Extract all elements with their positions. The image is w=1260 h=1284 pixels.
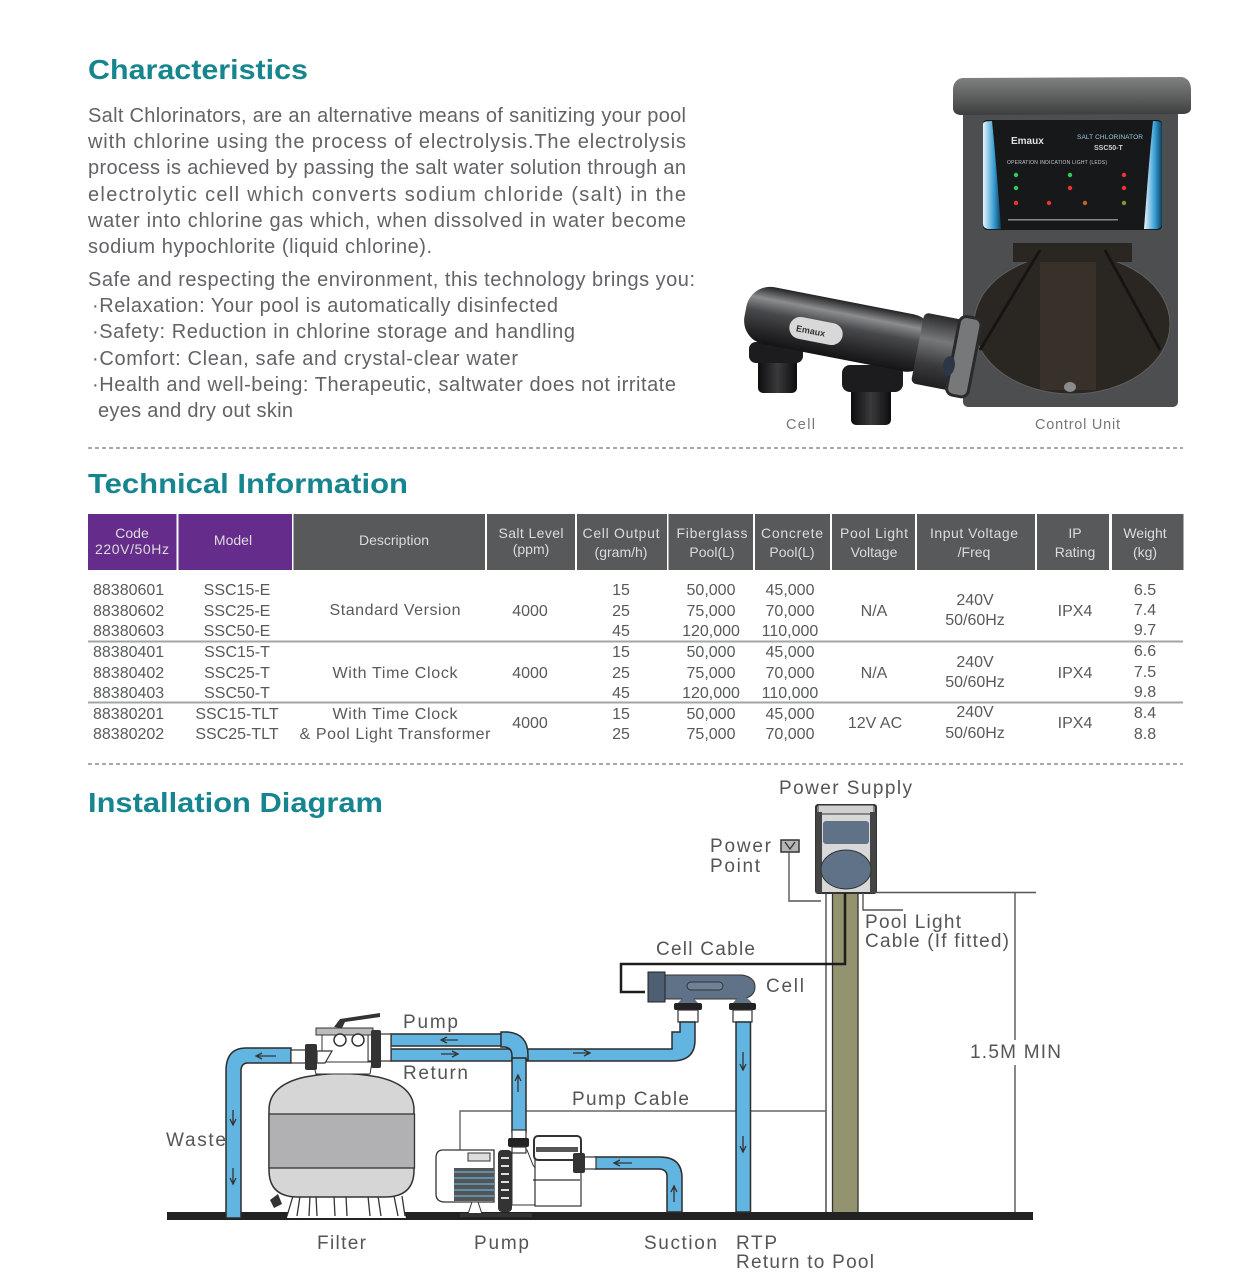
table rows: time clock and pool light transformer: 70,000: [766, 726, 815, 743]
label: Power Point: Point: [710, 856, 761, 877]
table rows: with time clock: SSC25-T: [204, 665, 270, 682]
label: Pool Light Cable: [865, 912, 1009, 952]
label: Pool Light Cable: Cable (If fitted): [865, 931, 1009, 952]
table rows: time clock and pool light transformer: [93, 704, 1156, 743]
label: Filter: Filter: [317, 1233, 367, 1254]
table rows: time clock and pool light transformer: SSC15-TLT: [195, 706, 279, 723]
photo: control unit: OPERATION INDICATION LIGHT (LEDS): [1007, 160, 1107, 166]
diagram: level and height lines: [863, 892, 1036, 1212]
label: Control Unit: Control Unit: [1035, 417, 1120, 433]
table rows: standard version: Standard Version: [330, 602, 460, 619]
text block: introduction: [87, 105, 686, 258]
table rows: with time clock: 110,000: [762, 685, 818, 702]
text block: introduction: electrolytic cell which converts sodium chloride (salt) in the: [88, 184, 686, 206]
label: Cell Cable: Cell Cable: [656, 939, 755, 960]
diagram: pump: [436, 1136, 585, 1217]
text block: introduction: sodium hypochlorite (liquid chlorine).: [88, 236, 432, 258]
table rows: with time clock: 7.5: [1134, 664, 1156, 681]
photo: cell: [737, 275, 982, 425]
table header: Model: [214, 532, 252, 548]
table rows: standard version: 50,000: [687, 582, 736, 599]
table rows: time clock and pool light transformer: 50/60Hz: [945, 725, 1005, 742]
text block: benefits list: ·Health and well-being: Therapeutic, saltwater does not irritate: [92, 374, 676, 396]
table header: Fiberglass: [676, 525, 748, 541]
table rows: time clock and pool light transformer: 8.4: [1134, 705, 1156, 722]
diagram: post with cables: [460, 893, 858, 1212]
table rows: with time clock: [93, 643, 1156, 702]
label: RTP Return to Pool: Return to Pool: [736, 1252, 874, 1273]
table header: Description: [359, 532, 429, 548]
table rows: standard version: SSC15-E: [204, 582, 270, 599]
table rows: with time clock: 50/60Hz: [945, 674, 1005, 691]
table rows: time clock and pool light transformer: 88380202: [93, 726, 164, 743]
table rows: standard version: 7.4: [1134, 602, 1156, 619]
label: Power Point: Power: [710, 836, 772, 857]
text block: benefits list: eyes and dry out skin: [98, 400, 293, 422]
label: Pump: Pump: [474, 1233, 529, 1254]
table rows: with time clock: 45,000: [766, 644, 815, 661]
table header: Cell Output: [582, 525, 660, 541]
table rows: standard version: 45,000: [766, 582, 815, 599]
diagram: pipes: [226, 1022, 750, 1218]
table rows: with time clock: 120,000: [682, 685, 740, 702]
table rows: standard version: 70,000: [766, 603, 815, 620]
table header: (gram/h): [595, 544, 647, 560]
table rows: time clock and pool light transformer: 8.8: [1134, 726, 1156, 743]
text block: benefits list: Safe and respecting the environment, this technology brings you:: [88, 269, 695, 291]
text block: benefits list: ·Safety: Reduction in chlorine storage and handling: [92, 321, 575, 343]
table header: Input Voltage: [930, 525, 1018, 541]
label: Power Supply: Power Supply: [779, 778, 912, 799]
table rows: standard version: N/A: [861, 603, 888, 620]
table rows: time clock and pool light transformer: IPX4: [1058, 715, 1092, 732]
text block: introduction: Salt Chlorinators, are an alternative means of sanitizing your pool: [88, 105, 686, 127]
label: Cell: Cell: [786, 417, 815, 433]
label: 1.5M MIN: 1.5M MIN: [970, 1042, 1061, 1063]
table rows: time clock and pool light transformer: SSC25-TLT: [195, 726, 279, 743]
table rows: with time clock: 15: [612, 644, 630, 661]
text block: introduction: process is achieved by passing the salt water solution through an: [88, 157, 686, 179]
heading: Characteristics: Characteristics: [88, 54, 308, 85]
table header: (kg): [1133, 544, 1157, 560]
diagram: cell cable: [621, 893, 845, 992]
text block: benefits list: ·Comfort: Clean, safe and crystal-clear water: [92, 348, 518, 370]
table rows: time clock and pool light transformer: 25: [612, 726, 630, 743]
table rows: time clock and pool light transformer: 45,000: [766, 706, 815, 723]
label: Pump Cable: Pump Cable: [572, 1089, 689, 1110]
table rows: time clock and pool light transformer: 15: [612, 706, 630, 723]
table rows: standard version: SSC25-E: [204, 603, 270, 620]
text block: benefits list: [88, 269, 695, 422]
diagram: power point: [781, 840, 821, 901]
table rows: standard version: 6.5: [1134, 582, 1156, 599]
table rows: with time clock: 88380403: [93, 685, 164, 702]
table rows: with time clock: 75,000: [687, 665, 736, 682]
table header: [88, 514, 1184, 570]
table header: Concrete: [761, 525, 823, 541]
label: Power Point: [710, 836, 772, 877]
table rows: with time clock: 88380402: [93, 665, 164, 682]
table rows: with time clock: 9.8: [1134, 684, 1156, 701]
table header: Salt Level: [498, 525, 564, 541]
table rows: with time clock: N/A: [861, 665, 888, 682]
label: RTP Return to Pool: RTP: [736, 1233, 777, 1254]
table header: Voltage: [851, 544, 898, 560]
table header: (ppm): [513, 541, 549, 557]
table rows: time clock and pool light transformer: 4000: [512, 715, 548, 732]
heading: Technical Information: Technical Information: [88, 468, 408, 499]
table rows: standard version: 50/60Hz: [945, 612, 1005, 629]
table rows: with time clock: SSC50-T: [204, 685, 270, 702]
table rows: standard version: 240V: [956, 592, 994, 609]
table rows: time clock and pool light transformer: & Pool Light Transformer: [300, 726, 491, 743]
photo: control unit: Emaux: [1011, 136, 1044, 147]
table header: Rating: [1055, 544, 1095, 560]
table rows: standard version: 75,000: [687, 603, 736, 620]
table rows: standard version: 88380602: [93, 603, 164, 620]
label: Pump: Pump: [403, 1012, 458, 1033]
table rows: standard version: [93, 582, 1156, 640]
table rows: with time clock: 25: [612, 665, 630, 682]
photo: control unit: [953, 77, 1191, 407]
table rows: time clock and pool light transformer: 75,000: [687, 726, 736, 743]
table rows: standard version: 88380601: [93, 582, 164, 599]
label: Cell: Cell: [766, 976, 804, 997]
table header: Weight: [1123, 525, 1167, 541]
label: RTP Return to Pool: [736, 1233, 874, 1273]
table header: /Freq: [958, 544, 990, 560]
table rows: standard version: 15: [612, 582, 630, 599]
text block: benefits list: ·Relaxation: Your pool is automatically disinfected: [92, 295, 558, 317]
photo: cell: Emaux: [795, 323, 826, 339]
table rows: standard version: 4000: [512, 603, 548, 620]
table rows: standard version: 45: [612, 623, 630, 640]
table rows: with time clock: 240V: [956, 654, 994, 671]
diagram: flow arrows: [230, 1037, 746, 1202]
table rows: standard version: 25: [612, 603, 630, 620]
table header: Code: [115, 525, 149, 541]
photo: control unit: SSC50-T: [1094, 145, 1124, 152]
table rows: time clock and pool light transformer: 88380201: [93, 706, 164, 723]
table header: Pool Light: [840, 525, 908, 541]
table rows: with time clock: 4000: [512, 665, 548, 682]
table rows: with time clock: With Time Clock: [332, 665, 458, 682]
table header: 220V/50Hz: [95, 541, 169, 557]
label: Suction: Suction: [644, 1233, 717, 1254]
table header: Pool(L): [689, 544, 735, 560]
text block: introduction: water into chlorine gas which, when dissolved in water become: [87, 210, 686, 232]
table rows: standard version: SSC50-E: [204, 623, 270, 640]
diagram: control unit: [816, 805, 876, 893]
table rows: time clock and pool light transformer: 50,000: [687, 706, 736, 723]
table rows: standard version: 9.7: [1134, 622, 1156, 639]
table rows: with time clock: SSC15-T: [204, 644, 270, 661]
table rows: standard version: 110,000: [762, 623, 818, 640]
photo: control unit: SALT CHLORINATOR: [1077, 134, 1143, 141]
table rows: time clock and pool light transformer: With Time Clock: [332, 706, 458, 723]
table rows: standard version: IPX4: [1058, 603, 1092, 620]
table header: Pool(L): [769, 544, 815, 560]
table rows: standard version: 88380603: [93, 623, 164, 640]
diagram: ground: [167, 1212, 1033, 1220]
table rows: with time clock: 50,000: [687, 644, 736, 661]
table rows: with time clock: 70,000: [766, 665, 815, 682]
table rows: with time clock: 45: [612, 685, 630, 702]
label: Return: Return: [403, 1063, 468, 1084]
table rows: standard version: 120,000: [682, 623, 740, 640]
diagram: cell unit: [648, 972, 756, 1022]
table rows: time clock and pool light transformer: 12V AC: [848, 715, 902, 732]
text block: introduction: with chlorine using the process of electrolysis.The electrolysis: [87, 131, 686, 153]
heading: Installation Diagram: Installation Diagram: [88, 787, 383, 818]
table rows: with time clock: 88380401: [93, 644, 164, 661]
table rows: with time clock: 6.6: [1134, 643, 1156, 660]
label: Waste: Waste: [166, 1130, 226, 1151]
table rows: time clock and pool light transformer: 240V: [956, 704, 994, 721]
table rows: with time clock: IPX4: [1058, 665, 1092, 682]
label: Pool Light Cable: Pool Light: [865, 912, 962, 933]
table header: IP: [1068, 525, 1082, 541]
diagram: filter: [269, 1013, 414, 1218]
